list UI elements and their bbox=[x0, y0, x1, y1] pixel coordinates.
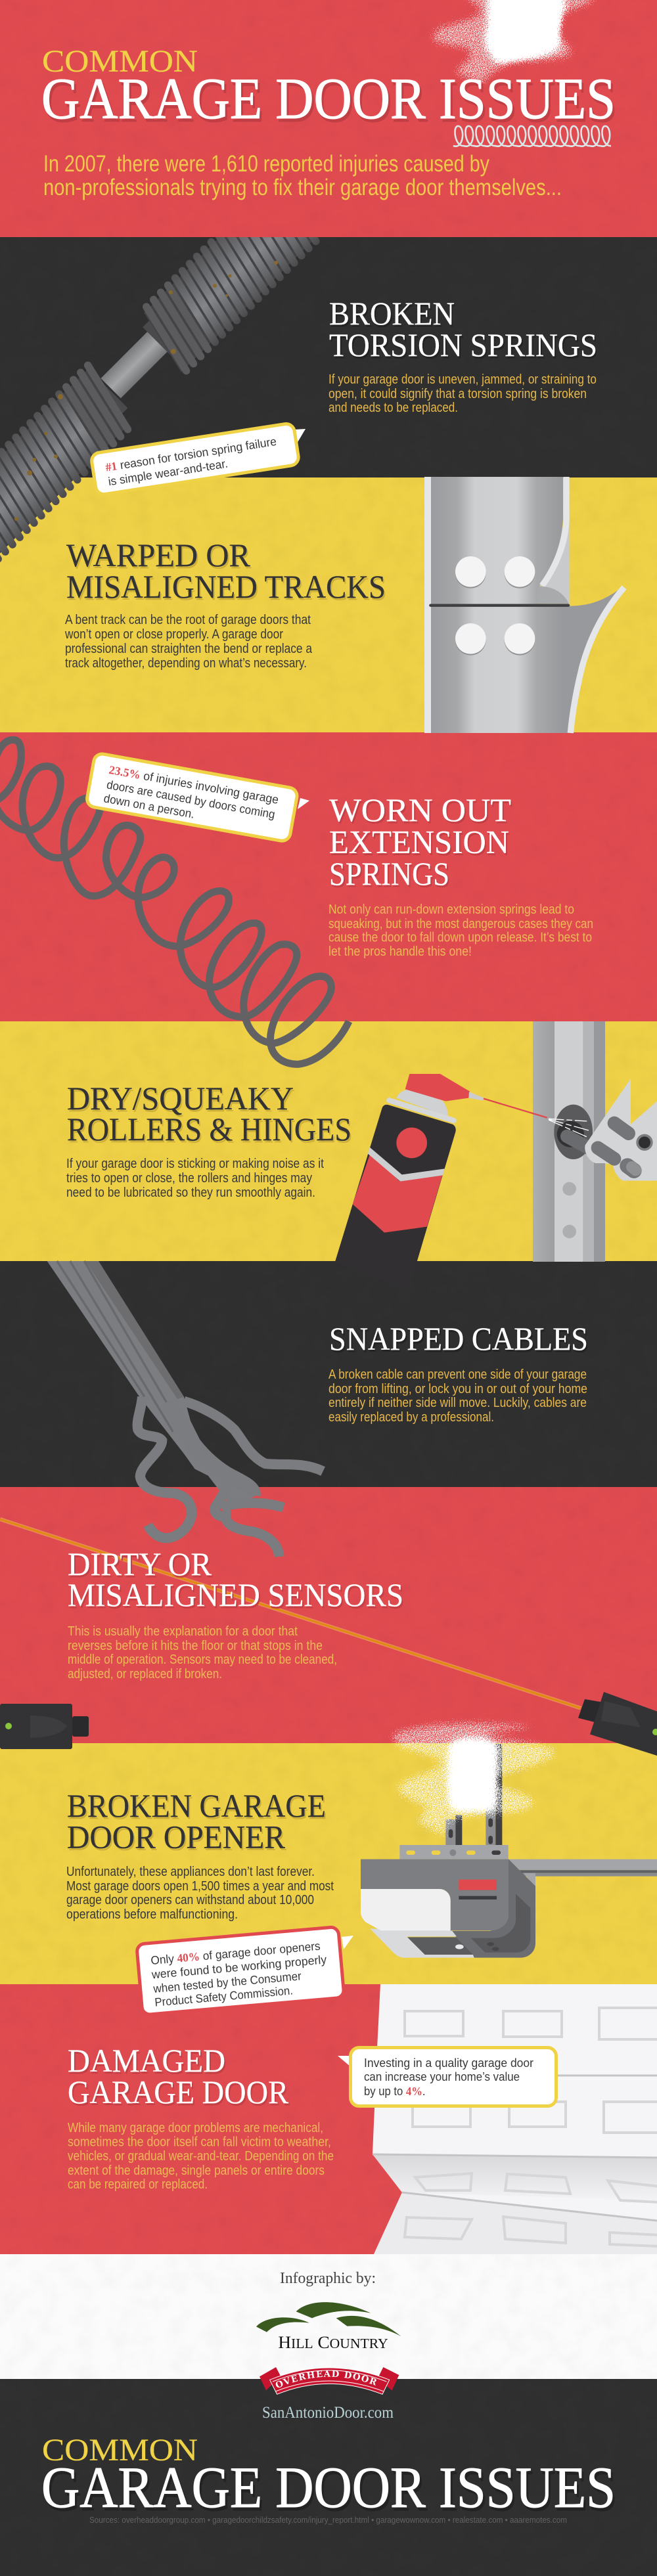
heading: broken torsion springs bbox=[329, 295, 597, 363]
text: snapped cables body: easily replaced by a professional. bbox=[328, 1410, 494, 1425]
logo: hill country overhead door bbox=[256, 2302, 401, 2395]
text: snapped cables body: A broken cable can prevent one side of your garage bbox=[328, 1367, 587, 1382]
heading: damaged garage door bbox=[68, 2042, 289, 2110]
text: torsion springs body bbox=[328, 372, 597, 415]
icon: bent track bbox=[424, 477, 624, 733]
panel: rollers and hinges background bbox=[0, 1021, 657, 1261]
heading: broken garage door opener bbox=[67, 1787, 326, 1855]
text: rollers body: need to be lubricated so they run smoothly again. bbox=[66, 1186, 315, 1200]
logo wordmark: HILL COUNTRY bbox=[278, 2333, 388, 2352]
callout: home value bbox=[338, 2048, 556, 2106]
text: damaged door body: While many garage door problems are mechanical, bbox=[68, 2121, 323, 2135]
text: sensors body: reverses before it hits the floor or that stops in the bbox=[68, 1639, 323, 1653]
heading: damaged garage door: DAMAGED bbox=[68, 2042, 225, 2079]
panel: footer background bbox=[0, 2379, 657, 2576]
panel: credit background bbox=[0, 2254, 657, 2379]
text: opener body: garage door openers can withstand about 10,000 bbox=[66, 1893, 314, 1907]
heading: broken torsion springs: BROKEN bbox=[329, 295, 455, 332]
text: infographic by: Infographic by: bbox=[280, 2270, 376, 2287]
heading: common: COMMON bbox=[42, 44, 198, 79]
callout: torsion spring failure bbox=[91, 423, 306, 495]
callout: 40 percent of openers: Product Safety Commission. bbox=[154, 1984, 294, 2009]
callout: torsion spring failure: #1 reason for torsion spring failure bbox=[104, 435, 277, 474]
text: intro statement bbox=[43, 151, 562, 200]
logo banner: OVERHEAD DOOR bbox=[276, 2370, 376, 2388]
text: intro statement: In 2007, there were 1,610 reported injuries caused by bbox=[43, 151, 489, 177]
text: sensors body: middle of operation. Sensors may need to be cleaned, bbox=[68, 1653, 337, 1667]
text: website: SanAntonioDoor.com bbox=[262, 2404, 394, 2422]
text: opener body: Unfortunately, these appliances don’t last forever. bbox=[66, 1865, 315, 1879]
text: warped tracks body: track altogether, depending on what’s necessary. bbox=[65, 656, 307, 671]
icon: smoke from opener bbox=[390, 1721, 557, 1840]
callout: 40 percent of openers: were found to be working properly bbox=[150, 1953, 327, 1982]
text: extension springs body: cause the door to fall down upon release. It’s best to bbox=[328, 930, 592, 944]
text: extension springs body: squeaking, but in the most dangerous cases they can bbox=[328, 917, 593, 931]
logo leaves bbox=[256, 2302, 401, 2336]
callout: home value: Investing in a quality garage door bbox=[364, 2056, 533, 2070]
callout: 23.5 percent of injuries: doors are caused by doors coming bbox=[106, 778, 276, 821]
heading: dry squeaky rollers and hinges bbox=[67, 1080, 351, 1147]
text: snapped cables body: entirely if neither side will move. Luckily, cables are bbox=[328, 1396, 587, 1410]
icon: extension spring bbox=[0, 740, 349, 1064]
icon: snapped cable bbox=[47, 1261, 323, 1557]
footer title bbox=[41, 2433, 616, 2520]
heading: worn out extension springs bbox=[329, 791, 511, 892]
text: opener body: Most garage doors open 1,500 times a year and most bbox=[66, 1879, 334, 1894]
hinge plate bbox=[585, 1078, 657, 1181]
title: common garage door issues bbox=[41, 44, 616, 131]
panel: sensors background bbox=[0, 1487, 657, 1743]
heading: dry squeaky rollers and hinges: DRY/SQUEAKY bbox=[67, 1080, 294, 1117]
uprights bbox=[445, 1819, 455, 1845]
callout: torsion spring failure: is simple wear-and-tear. bbox=[107, 457, 229, 488]
text: sensors body: This is usually the explanation for a door that bbox=[68, 1624, 298, 1639]
heading: footer common: COMMON bbox=[42, 2433, 198, 2468]
icon: torsion spring bbox=[0, 237, 319, 562]
panel: warped tracks background bbox=[0, 477, 657, 732]
heading: dry squeaky rollers and hinges: ROLLERS & HINGES bbox=[67, 1111, 351, 1147]
heading: garage door issues: GARAGE DOOR ISSUES bbox=[41, 67, 616, 131]
callout: 40 percent of openers: when tested by the Consumer bbox=[152, 1969, 302, 1995]
text: damaged door body: vehicles, or gradual wear-and-tear. Depending on the bbox=[68, 2149, 334, 2164]
text: rollers body: tries to open or close, the rollers and hinges may bbox=[66, 1171, 312, 1186]
panel: damaged door background bbox=[0, 1984, 657, 2254]
text: warped tracks body bbox=[64, 613, 313, 671]
callout: 40 percent of openers bbox=[137, 1926, 353, 2015]
callout: home value: can increase your home’s value bbox=[364, 2070, 520, 2083]
text: damaged door body: extent of the damage, single panels or entire doors bbox=[68, 2164, 325, 2178]
bolts bbox=[455, 556, 535, 655]
heading: damaged garage door: GARAGE DOOR bbox=[68, 2074, 289, 2110]
panel: opener background bbox=[0, 1743, 657, 1984]
callout: 23.5 percent of injuries: down on a person. bbox=[102, 791, 196, 821]
panel: broken torsion springs background bbox=[0, 237, 657, 477]
icon: sensor beam bbox=[0, 1519, 581, 1708]
heading: worn out extension springs: SPRINGS bbox=[329, 855, 449, 892]
text: torsion springs body: and needs to be replaced. bbox=[328, 401, 458, 415]
callout: 23.5 percent of injuries bbox=[85, 753, 309, 842]
logo banner bbox=[260, 2367, 399, 2395]
text: snapped cables body bbox=[328, 1367, 587, 1425]
text: snapped cables body: door from lifting, or lock you in or out of your home bbox=[328, 1382, 587, 1396]
text: extension springs body bbox=[328, 902, 593, 959]
spray streaks bbox=[549, 1119, 590, 1138]
heading: dirty or misaligned sensors: DIRTY OR bbox=[68, 1545, 212, 1582]
callout: 40 percent of openers: Only 40% of garage door openers bbox=[150, 1940, 321, 1967]
text: torsion springs body: open, it could signify that a torsion spring is broken bbox=[328, 387, 587, 401]
callout: 23.5 percent of injuries: 23.5% of injuries involving garage bbox=[108, 763, 280, 807]
panel: snapped cables background bbox=[0, 1261, 657, 1487]
icon: decorative spring under title bbox=[453, 126, 611, 146]
text: damaged door body: can be repaired or replaced. bbox=[68, 2177, 208, 2192]
text: torsion springs body: If your garage door is uneven, jammed, or straining to bbox=[328, 372, 597, 387]
text: damaged door body bbox=[68, 2121, 334, 2192]
text: rollers body: If your garage door is sticking or making noise as it bbox=[66, 1157, 324, 1171]
heading: dirty or misaligned sensors: MISALIGNED SENSORS bbox=[68, 1576, 403, 1613]
heading: warped or misaligned tracks: WARPED OR bbox=[66, 537, 251, 573]
heading: worn out extension springs: WORN OUT bbox=[329, 791, 511, 828]
text: extension springs body: Not only can run-down extension springs lead to bbox=[328, 902, 574, 917]
text: warped tracks body: A bent track can be the root of garage doors that bbox=[65, 613, 311, 627]
heading: dirty or misaligned sensors bbox=[68, 1545, 403, 1613]
icon: right sensor bbox=[578, 1692, 657, 1756]
rust specks bbox=[14, 261, 278, 521]
text: rollers body bbox=[66, 1157, 324, 1200]
text: damaged door body: sometimes the door itself can fall victim to weather, bbox=[68, 2135, 331, 2149]
text: extension springs body: let the pros handle this one! bbox=[328, 944, 472, 959]
heading: warped or misaligned tracks: MISALIGNED TRACKS bbox=[66, 568, 386, 605]
text: warped tracks body: professional can straighten the bend or replace a bbox=[65, 642, 313, 656]
text: sources: Sources: overheaddoorgroup.com • garagedoorchildzsafety.com/injury_report.html • garagewownow.com • realestate.com • aaaremotes.com bbox=[89, 2516, 567, 2525]
text: intro statement: non-professionals trying to fix their garage door themselves... bbox=[43, 175, 562, 200]
icon: spray can bbox=[335, 1074, 547, 1289]
callout: home value: by up to 4%. bbox=[364, 2085, 426, 2098]
heading: footer garage door issues: GARAGE DOOR ISSUES bbox=[41, 2456, 616, 2520]
text: warped tracks body: won’t open or close properly. A garage door bbox=[64, 627, 283, 642]
heading: broken torsion springs: TORSION SPRINGS bbox=[329, 326, 597, 363]
icon: left sensor bbox=[0, 1704, 89, 1749]
text: opener body: operations before malfunctioning. bbox=[66, 1907, 238, 1922]
heading: broken garage door opener: DOOR OPENER bbox=[67, 1818, 286, 1855]
illustration: damaged garage door bbox=[373, 1984, 657, 2254]
text: sensors body: adjusted, or replaced if broken. bbox=[68, 1667, 222, 1681]
panel: header background bbox=[0, 0, 657, 237]
icon: smoke at top of header bbox=[432, 0, 598, 87]
heading: worn out extension springs: EXTENSION bbox=[329, 824, 509, 860]
heading: broken garage door opener: BROKEN GARAGE bbox=[67, 1787, 326, 1824]
text: sensors body bbox=[68, 1624, 337, 1681]
heading: snapped cables: SNAPPED CABLES bbox=[329, 1320, 588, 1357]
icon: garage door opener bbox=[361, 1744, 657, 1958]
text: opener body bbox=[66, 1865, 334, 1922]
icon: track and roller hinge bbox=[533, 1021, 657, 1262]
panel: extension springs background bbox=[0, 732, 657, 1021]
heading: warped or misaligned tracks bbox=[66, 537, 386, 605]
